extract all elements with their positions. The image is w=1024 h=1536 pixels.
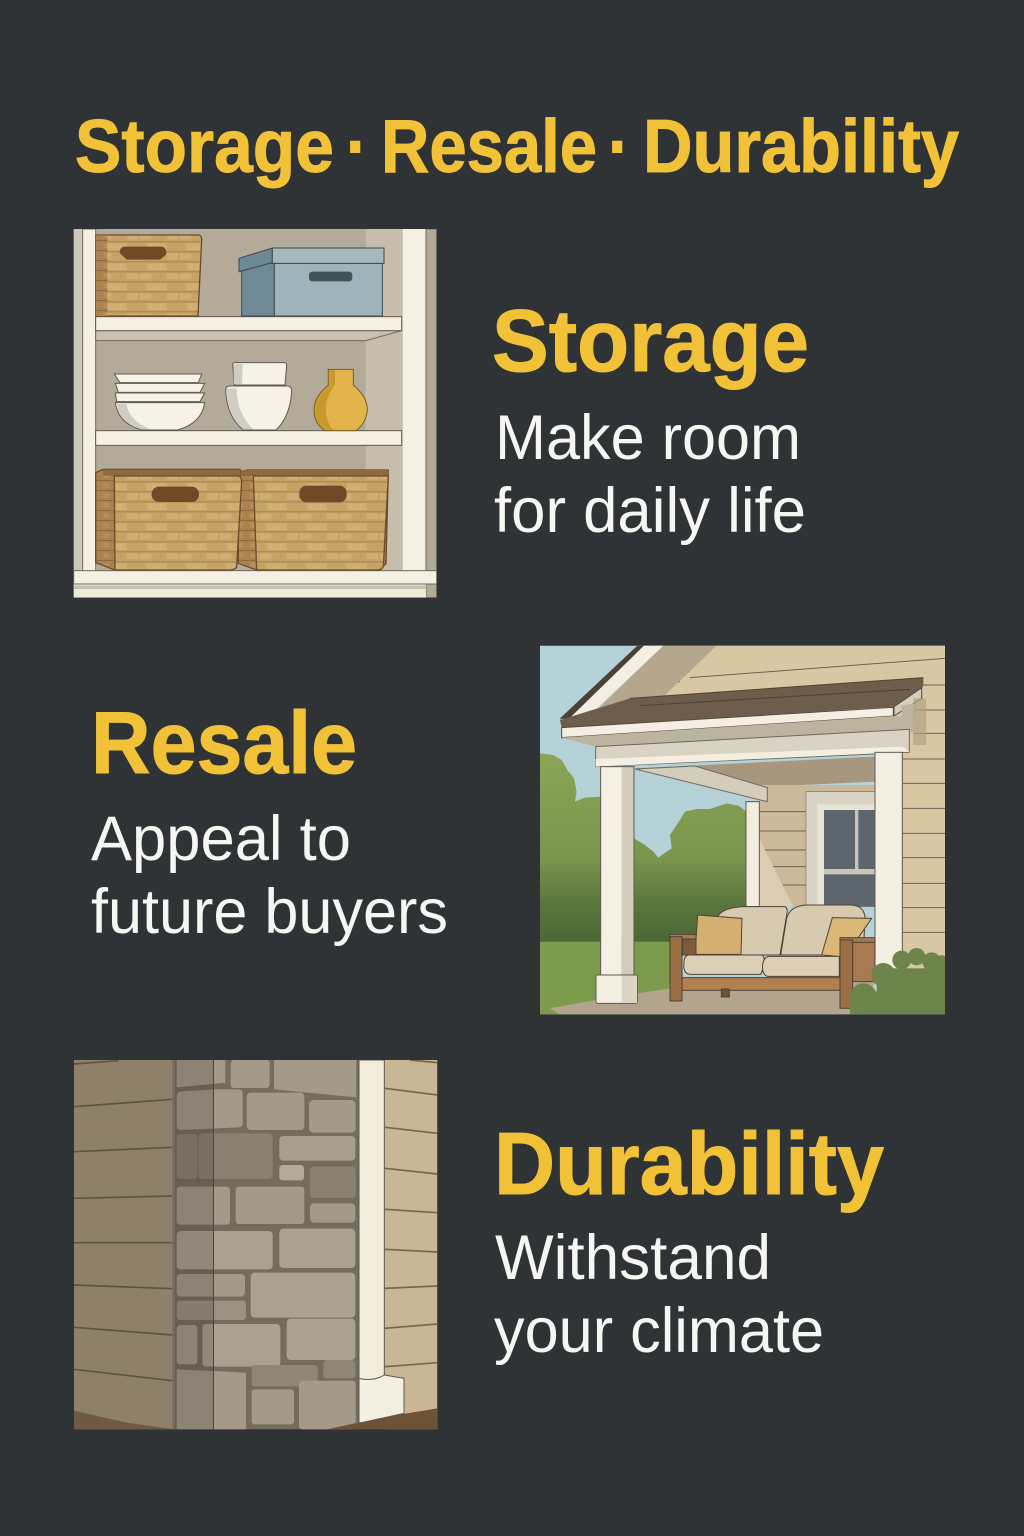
upper shelf: [96, 317, 402, 341]
panel: resale porch illustration: [540, 646, 950, 1014]
title: ·: [608, 104, 630, 188]
storage caption: for daily life: [494, 476, 806, 546]
storage heading: Storage: [492, 291, 809, 390]
window: [806, 792, 875, 907]
resale caption: future buyers: [91, 877, 448, 947]
shrub: [850, 948, 950, 1014]
resale caption: Appeal to: [91, 804, 351, 874]
sky: [540, 646, 945, 1014]
patio: [550, 982, 875, 1014]
right siding: [327, 1060, 437, 1429]
durability caption: Withstand: [495, 1223, 771, 1293]
gable shadow: [597, 646, 717, 710]
lower wicker baskets: [96, 469, 388, 570]
soffit and bracket: [562, 698, 926, 747]
stone corner shade: [175, 1060, 214, 1429]
durability caption: your climate: [494, 1296, 824, 1366]
roof shingles: [560, 678, 923, 728]
storage caption: Make room: [495, 403, 801, 473]
title: ·: [346, 104, 368, 188]
durability heading: Durability: [494, 1114, 884, 1213]
main beam: [596, 729, 909, 767]
stack of white plates and bowl: [114, 374, 205, 430]
right column: [875, 752, 902, 969]
porch sofa: [669, 905, 875, 1008]
upper gable siding: [648, 646, 945, 972]
porch ceiling: [635, 757, 875, 787]
title: Storage: [75, 104, 334, 188]
left siding: [74, 1060, 175, 1429]
stone corner: [177, 1060, 356, 1429]
panel: durability stone and siding illustration: [74, 1060, 437, 1429]
side wall of the cabinet: [366, 229, 402, 572]
back post: [746, 802, 759, 907]
gable trim: [569, 646, 663, 718]
trees: [540, 753, 747, 945]
title: [75, 104, 959, 188]
roof rake edge: [559, 646, 644, 719]
middle shelf: [96, 431, 402, 445]
back porch wall with siding: [759, 785, 875, 907]
lawn: [540, 942, 673, 1014]
title: Resale: [381, 104, 597, 188]
resale caption: [91, 804, 448, 947]
basket top left: [96, 235, 202, 316]
left column: [596, 767, 637, 1003]
white downspout: [359, 1060, 404, 1423]
durability caption: [494, 1223, 824, 1366]
resale heading: Resale: [91, 693, 357, 792]
yellow vase: [314, 369, 367, 431]
stacked white bowls: [226, 363, 292, 430]
mortar backing: [172, 1060, 359, 1429]
roof fascia: [562, 688, 922, 738]
bottom shelf: [74, 571, 437, 598]
storage caption: [494, 403, 806, 546]
blue storage box: [239, 248, 384, 316]
panel: storage illustration: [74, 229, 437, 598]
title: Durability: [643, 104, 959, 188]
right cabinet post: [403, 229, 437, 598]
left cabinet post: [74, 229, 96, 572]
side beam: [635, 766, 767, 802]
